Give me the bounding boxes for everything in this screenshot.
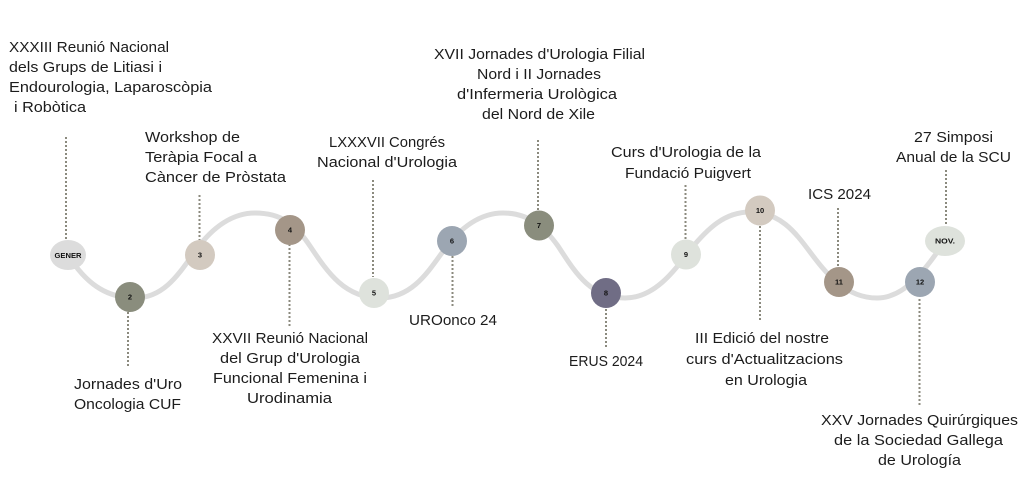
node: 8 [591, 278, 621, 308]
node: 10: 10 [756, 206, 764, 215]
label: Workshop [145, 129, 287, 186]
label: XXXIII Reunió Nacional: XXXIII Reunió Nacional [9, 39, 169, 56]
label: XXVII Reunió Nacional: XXVII Reunió Nacional [212, 330, 368, 347]
label: III Edició: en Urologia [725, 372, 808, 389]
label: Jornades d'Uro Oncologia: Jornades d'Uro [74, 376, 182, 393]
dotted connectors [66, 137, 946, 405]
label: XXXIII Reunió Nacional: dels Grups de Litiasi i [9, 59, 162, 76]
label: Workshop: Càncer de Pròstata [145, 169, 287, 186]
node: 12 [905, 267, 935, 297]
node: 9 [671, 240, 701, 270]
label: LXXXVII Congrés: LXXXVII Congrés [329, 134, 445, 151]
label: ICS 2024: ICS 2024 [808, 186, 871, 203]
label: III Edició [686, 330, 843, 389]
node: Nov [925, 226, 965, 256]
label: III Edició: III Edició del nostre [695, 330, 829, 347]
node: 11 [824, 267, 854, 297]
label: UROonco 24: UROonco 24 [409, 312, 497, 329]
label: XVII Jornades: Nord i II Jornades [477, 66, 601, 83]
label: XXXIII Reunió Nacional: Endourologia, Laparoscòpia [9, 79, 213, 96]
label: Curs Fundació Puigvert: Curs d'Urologia de la [611, 144, 762, 161]
node: Gener: GENER [54, 251, 82, 260]
node: 9: 9 [684, 250, 688, 259]
label: 27 Simposi [896, 129, 1011, 166]
label: Jornades d'Uro Oncologia: Oncologia CUF [74, 396, 181, 413]
label: Curs Fundació Puigvert [611, 144, 762, 182]
label: Workshop: Teràpia Focal a [145, 149, 258, 166]
node: 12: 12 [916, 278, 924, 286]
label: 27 Simposi: Anual de la SCU [896, 149, 1011, 166]
node: 6: 6 [450, 236, 454, 246]
node: 3: 3 [198, 250, 202, 260]
node: 10 [745, 196, 775, 226]
label: Jornades d'Uro Oncologia [74, 376, 182, 413]
label: XVII Jornades: d'Infermeria Urològica [457, 86, 618, 103]
label: XVII Jornades [434, 46, 645, 123]
label: XXVII Reunió Nacional: del Grup d'Urologia [220, 350, 361, 367]
node: 8: 8 [604, 288, 608, 298]
node: 6 [437, 226, 467, 256]
node: 11: 11 [835, 278, 843, 286]
label: LXXXVII Congrés [317, 134, 458, 171]
label: XXVII Reunió Nacional: Urodinamia [247, 390, 333, 407]
label: XXVII Reunió Nacional: Funcional Femenina i [213, 370, 367, 387]
label: XXXIII Reunió Nacional [9, 39, 213, 116]
label: 27 Simposi: 27 Simposi [914, 129, 993, 146]
node: 4: 4 [288, 226, 293, 234]
label: XXXIII Reunió Nacional: i Robòtica [14, 99, 87, 116]
label: XXV Jornades Quirúrgiques [821, 412, 1018, 469]
label: XXV Jornades Quirúrgiques: XXV Jornades Quirúrgiques [821, 412, 1018, 429]
node: 3 [185, 240, 215, 270]
node: 5 [359, 278, 389, 308]
node: 2: 2 [128, 292, 132, 302]
label: XXV Jornades Quirúrgiques: de la Sociedad Gallega [834, 432, 1004, 449]
node: Nov: NOV. [935, 236, 955, 246]
node: 4 [275, 215, 305, 245]
label: ERUS 2024: ERUS 2024 [569, 353, 643, 370]
label: LXXXVII Congrés: Nacional d'Urologia [317, 154, 458, 171]
node: 5: 5 [372, 288, 376, 298]
label: XXVII Reunió Nacional [212, 330, 368, 407]
node: Gener [50, 240, 86, 270]
label: XVII Jornades: XVII Jornades d'Urologia Filial [434, 46, 645, 63]
node: 7: 7 [537, 221, 541, 230]
label: Curs Fundació Puigvert: Fundació Puigvert [625, 165, 752, 182]
label: III Edició: curs d'Actualitzacions [686, 351, 843, 368]
node: 2 [115, 282, 145, 312]
node: 7 [524, 210, 554, 240]
label: Workshop: Workshop de [145, 129, 240, 146]
wavy timeline path [68, 212, 945, 298]
label: XVII Jornades: del Nord de Xile [482, 106, 595, 123]
label: XXV Jornades Quirúrgiques: de Urología [878, 452, 962, 469]
